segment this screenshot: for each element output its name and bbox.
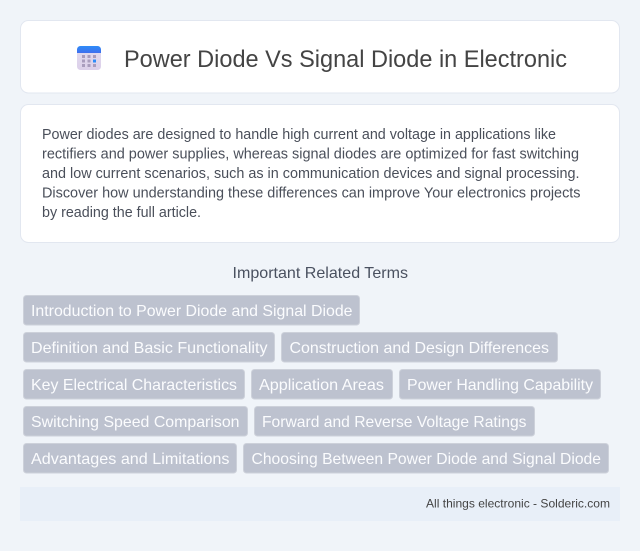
tag: power handling: Power Handling Capability	[407, 377, 593, 394]
tag: application areas	[252, 370, 392, 399]
text block: description: rectifiers and power supplies, whereas signal diodes are optimized for fast switching	[42, 146, 579, 162]
tag: introduction	[24, 296, 360, 325]
text block: description: Power diodes are designed to handle high current and voltage in applications like	[42, 127, 556, 143]
heading: important related terms: Important Related Terms	[232, 265, 408, 282]
tag: forward and reverse: Forward and Reverse Voltage Ratings	[262, 414, 526, 431]
tag: power handling	[400, 370, 600, 399]
title: Power Diode Vs Signal Diode in Electronic	[124, 46, 567, 73]
text block: description: Discover how understanding these differences can improve Your electronics projects	[42, 186, 580, 202]
tag: construction: Construction and Design Differences	[290, 340, 549, 357]
tag: introduction: Introduction to Power Diode and Signal Diode	[31, 303, 353, 320]
tag: switching speed	[24, 406, 248, 436]
tag: advantages	[24, 444, 236, 473]
footer	[20, 487, 620, 521]
tag: switching speed: Switching Speed Comparison	[31, 414, 240, 431]
tag: application areas: Application Areas	[259, 377, 384, 394]
tag: key electrical	[24, 370, 244, 399]
icon: calendar	[77, 46, 101, 70]
text block: description: by reading the full article.	[42, 205, 201, 221]
tag: definition: Definition and Basic Functionality	[31, 340, 268, 357]
text block: description: and low current scenarios, such as in communication devices and signal processing.	[42, 166, 580, 182]
tag: forward and reverse	[254, 406, 534, 436]
panel: description card	[20, 104, 620, 242]
tag: construction	[282, 332, 558, 362]
tag: choosing: Choosing Between Power Diode and Signal Diode	[252, 451, 601, 468]
tag: definition	[24, 332, 274, 362]
footer: All things electronic - Solderic.com	[426, 496, 610, 510]
panel: header card	[20, 20, 620, 93]
tag: advantages: Advantages and Limitations	[31, 451, 229, 468]
text block: description	[42, 127, 580, 221]
panel: related terms tags	[24, 296, 608, 473]
tag: key electrical: Key Electrical Characteristics	[31, 377, 237, 394]
tag: choosing	[244, 444, 608, 473]
